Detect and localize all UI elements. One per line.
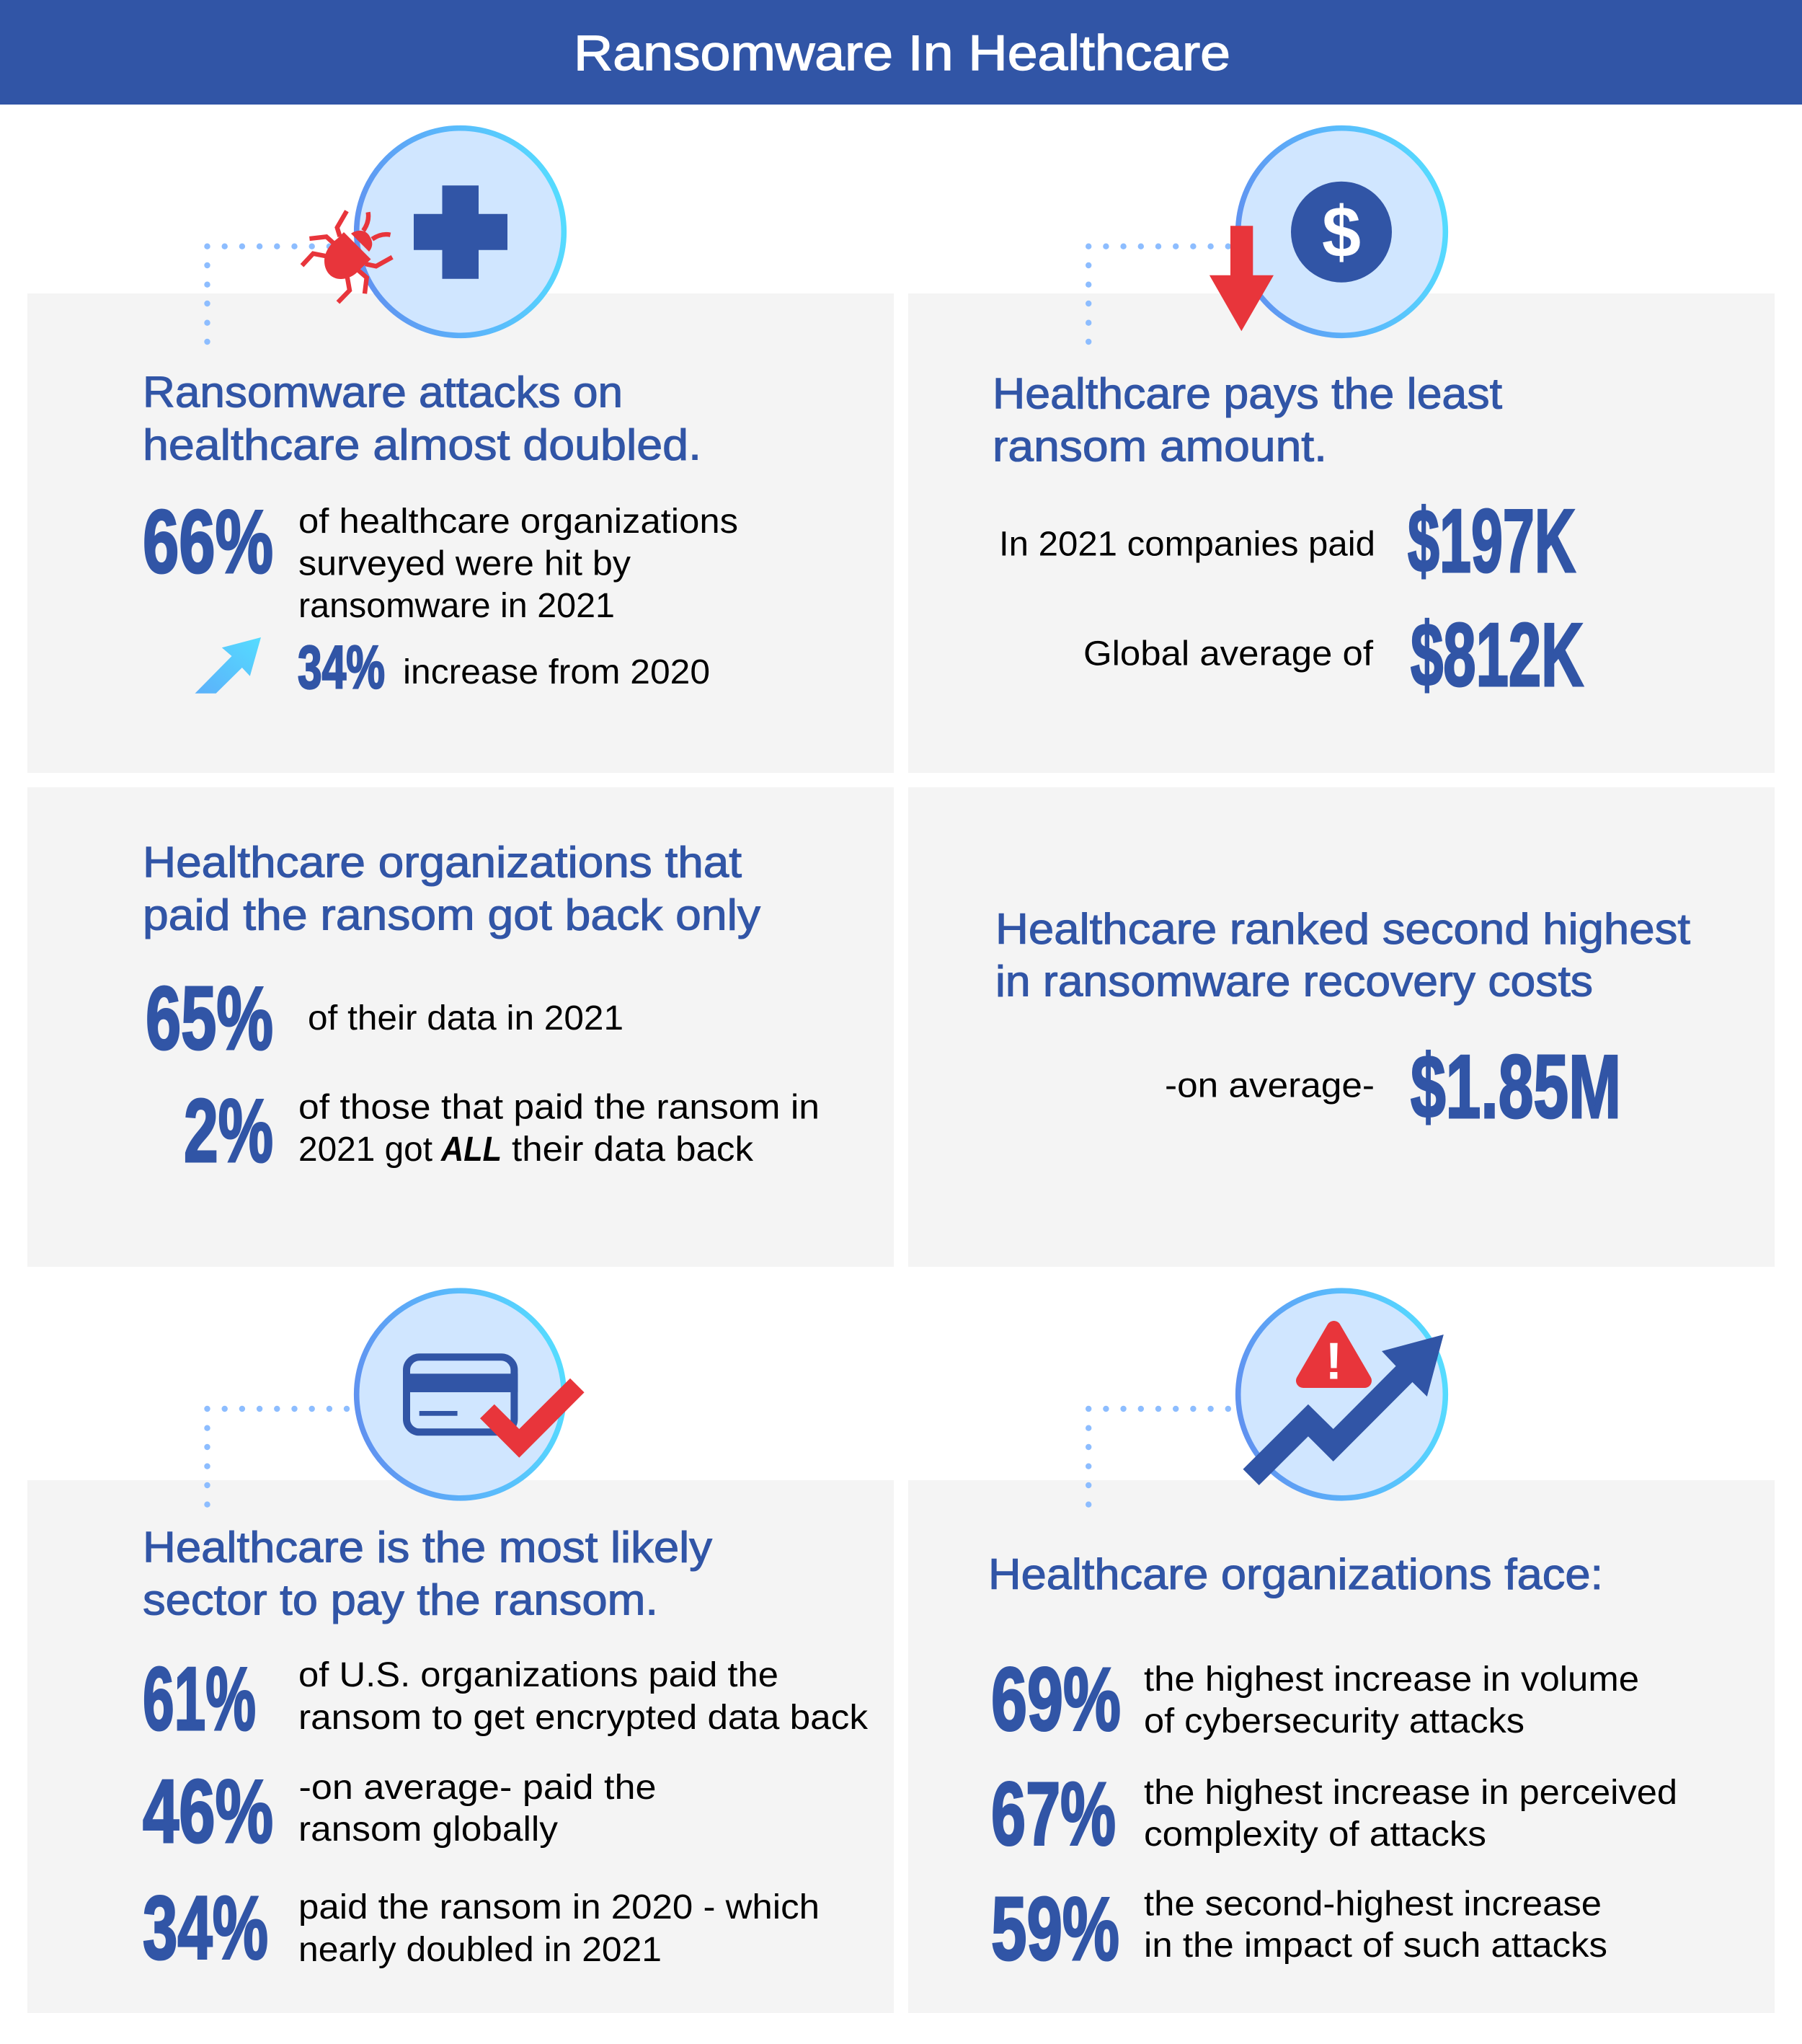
icon: medical cross with bug: [302, 128, 564, 335]
text: all data back: 2021 got: [298, 1131, 432, 1169]
dotted line: trend: [1086, 1406, 1231, 1508]
panel: data recovered: [27, 787, 894, 1267]
text: 66% description: of healthcare organizations: [298, 503, 738, 541]
text: increase from 2020: increase from 2020: [403, 653, 710, 691]
text: 67% description: [1144, 1774, 1677, 1854]
text: 34% description: nearly doubled in 2021: [298, 1931, 662, 1969]
icon: dollar with down arrow: $: [1322, 192, 1361, 273]
icon: dollar with down arrow: [1210, 128, 1445, 335]
text: all data back: their data back: [512, 1131, 754, 1169]
stat: 2%: 2%: [184, 1081, 273, 1181]
stat: $197K: $197K: [1408, 492, 1576, 591]
text: 66% description: [298, 503, 738, 625]
text: all data back: ALL: [440, 1131, 502, 1169]
heading: data recovered: [143, 839, 760, 939]
text: 59% description: in the impact of such attacks: [1144, 1926, 1607, 1965]
stat: 65%: 65%: [146, 969, 273, 1069]
heading: data recovered: paid the ransom got back only: [143, 890, 760, 939]
stat: 67%: 67%: [991, 1765, 1116, 1864]
panel: recovery costs: [908, 787, 1775, 1267]
text: companies paid: In 2021 companies paid: [999, 526, 1375, 564]
stat: 34%: 34%: [298, 633, 385, 701]
panel: organizations face: [908, 1480, 1775, 2013]
panel: attacks doubled: [27, 293, 894, 773]
heading: attacks doubled: [143, 368, 701, 469]
text: 61% description: of U.S. organizations paid the: [298, 1656, 778, 1694]
text: 66% description: surveyed were hit by: [298, 545, 631, 583]
stat: 66%: 66%: [143, 492, 273, 592]
text: 61% description: [298, 1656, 869, 1737]
stat: $1.85M: $1.85M: [1411, 1038, 1621, 1137]
stat: 61%: 61%: [143, 1650, 256, 1749]
text: 59% description: [1144, 1885, 1607, 1965]
dotted line: payments: [1086, 244, 1231, 345]
text: of their data: of their data in 2021: [308, 999, 623, 1038]
text: 46% description: ransom globally: [298, 1810, 558, 1849]
heading: most likely to pay: Healthcare is the most likely: [143, 1523, 712, 1572]
text: all data back: of those that paid the ransom in: [298, 1089, 820, 1127]
stat: 69%: 69%: [991, 1650, 1121, 1749]
stat: 59%: 59%: [991, 1880, 1119, 1979]
heading: least ransom: [993, 370, 1502, 470]
heading: least ransom: ransom amount.: [993, 422, 1327, 470]
heading: most likely to pay: sector to pay the ransom.: [143, 1576, 658, 1624]
heading: attacks doubled: healthcare almost doubled.: [143, 421, 701, 469]
heading: recovery costs: Healthcare ranked second highest: [995, 905, 1690, 953]
heading: most likely to pay: [143, 1523, 712, 1624]
text: global average: Global average of: [1083, 635, 1374, 673]
text: 67% description: the highest increase in perceived: [1144, 1774, 1677, 1812]
text: 46% description: [298, 1769, 656, 1849]
heading: data recovered: Healthcare organizations that: [143, 839, 742, 887]
text: 69% description: the highest increase in volume: [1144, 1660, 1639, 1699]
text: 61% description: ransom to get encrypted data back: [298, 1699, 869, 1737]
arrow: increase: [195, 637, 261, 694]
dotted line: attacks: [204, 244, 332, 345]
text: 34% description: [298, 1888, 820, 1969]
panel: least ransom: [908, 293, 1775, 773]
heading: least ransom: Healthcare pays the least: [993, 370, 1502, 418]
text: 69% description: [1144, 1660, 1639, 1740]
icon: credit card with check: [357, 1291, 585, 1498]
stat: 46%: 46%: [143, 1762, 273, 1862]
text: 46% description: -on average- paid the: [298, 1769, 656, 1807]
text: 67% description: complexity of attacks: [1144, 1815, 1486, 1854]
panel: most likely to pay: [27, 1480, 894, 2013]
heading: recovery costs: [995, 905, 1690, 1006]
text: all data back: [298, 1089, 820, 1169]
heading: organizations face: Healthcare organizations face:: [988, 1550, 1603, 1598]
text: 59% description: the second-highest increase: [1144, 1885, 1602, 1924]
icon: warning with rising arrow: !: [1326, 1332, 1342, 1390]
stat: $812K: $812K: [1411, 606, 1584, 705]
header banner: [0, 0, 1802, 105]
dotted line: card: [204, 1406, 350, 1508]
title: Ransomware In Healthcare: [574, 25, 1230, 81]
heading: attacks doubled: Ransomware attacks on: [143, 368, 623, 417]
heading: recovery costs: in ransomware recovery costs: [995, 957, 1593, 1006]
icon: warning with rising arrow: [1238, 1291, 1445, 1498]
text: on average: -on average-: [1165, 1067, 1375, 1105]
text: 34% description: paid the ransom in 2020 - which: [298, 1888, 820, 1926]
stat: 34%: 34%: [143, 1879, 268, 1978]
icon: bug: [302, 211, 392, 302]
text: 69% description: of cybersecurity attacks: [1144, 1702, 1524, 1740]
text: 66% description: ransomware in 2021: [298, 587, 615, 625]
